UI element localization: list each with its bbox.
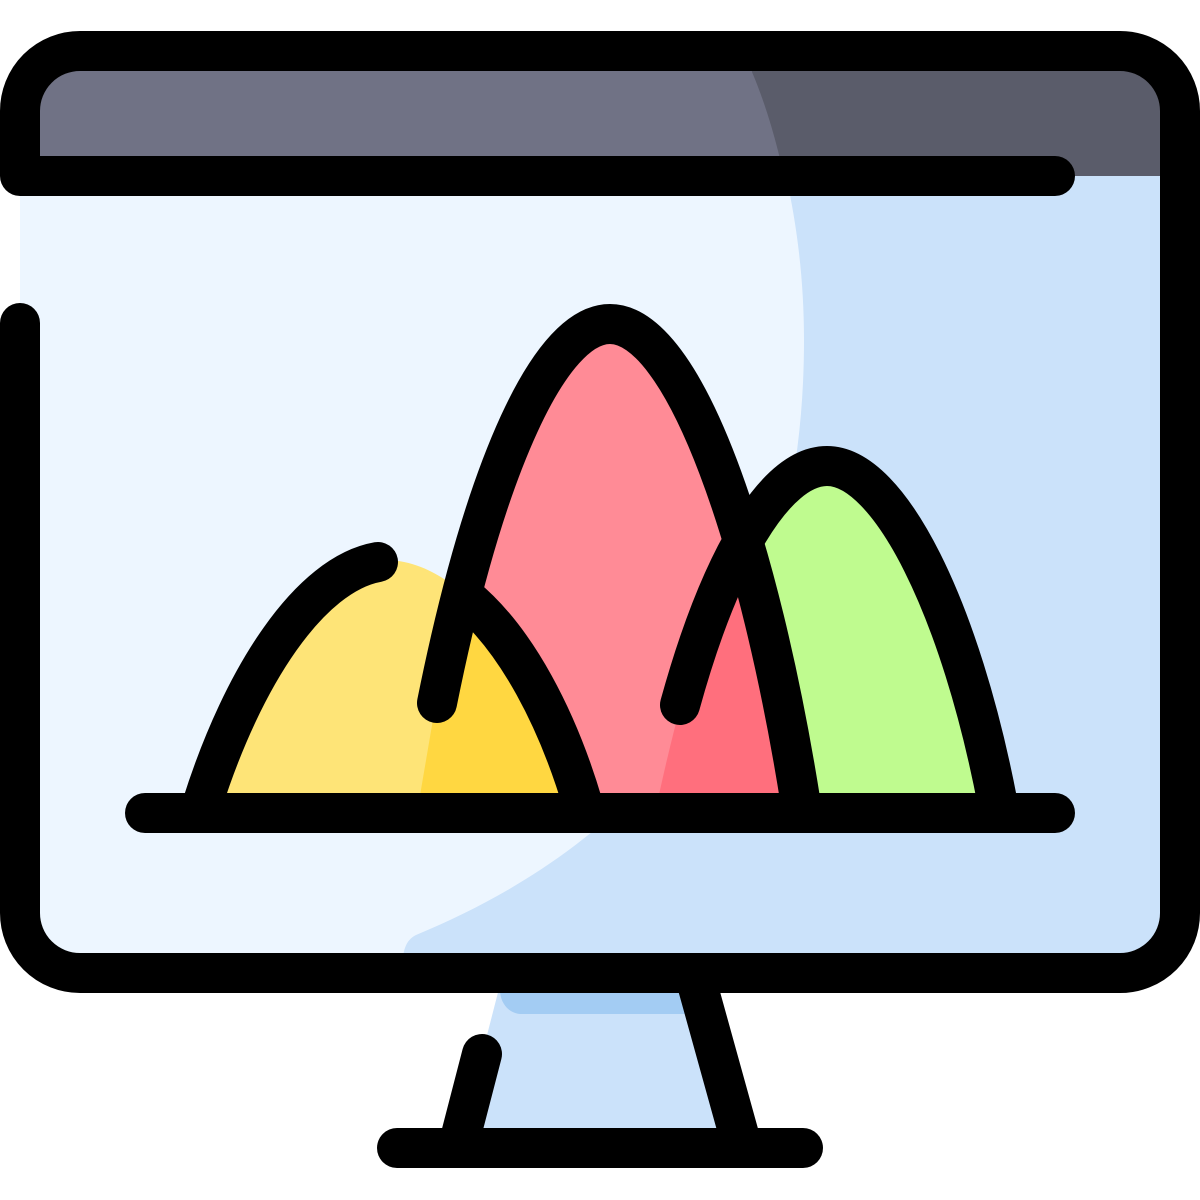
monitor stand [458, 973, 742, 1148]
title bar [20, 51, 1180, 176]
screen background [20, 176, 1180, 973]
chart: green area [740, 466, 998, 813]
chart outline [145, 324, 1055, 813]
chart: red area [465, 324, 801, 813]
chart: yellow area [202, 560, 583, 813]
